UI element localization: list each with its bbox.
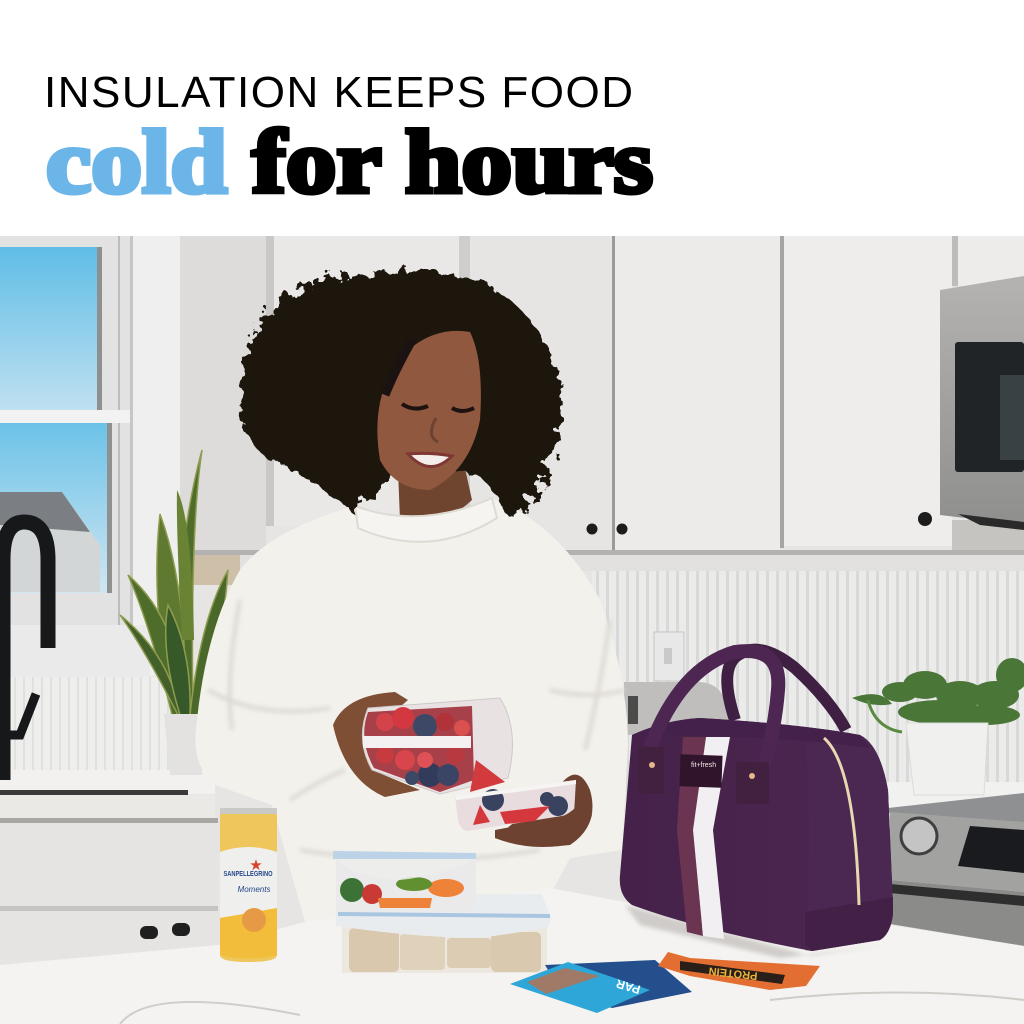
header panel: [0, 0, 1024, 236]
bag label: [679, 754, 723, 788]
veggie container: [333, 851, 476, 911]
nose: [431, 418, 438, 442]
window frame: [0, 236, 130, 628]
can name: SANPELLEGRINO: [224, 871, 273, 878]
kitchen photo scene: [0, 236, 1024, 1024]
snake plant: [120, 450, 228, 715]
title: cold for hours: [46, 113, 653, 212]
face: [377, 331, 481, 490]
smile: [408, 453, 452, 467]
upper cabinets: [180, 236, 1024, 585]
berry jar: [362, 698, 512, 794]
neighbouring house: [0, 492, 100, 592]
bag handle tab right: [736, 762, 769, 804]
jar glass: [362, 698, 512, 794]
can star: ★: [249, 857, 263, 874]
pouch window: [527, 968, 600, 994]
woman: [195, 271, 628, 922]
veggie lid: [333, 851, 476, 859]
blue pouch: [510, 962, 650, 1013]
jar berries: [364, 706, 474, 792]
protein bar: [658, 952, 820, 990]
title: insulation keeps food: INSULATION KEEPS FOOD: [44, 68, 633, 117]
can peach: [242, 908, 266, 932]
counter behind stove: [886, 782, 1024, 812]
faucet: [3, 522, 48, 780]
pothos plant: [852, 658, 1024, 732]
jar glare: [363, 736, 471, 748]
wrap lid: [336, 894, 551, 938]
kitchen island marble: [0, 888, 1024, 1024]
bag handle tab left: [638, 747, 664, 794]
window: [0, 236, 180, 677]
cabinet knobs: [586, 512, 932, 534]
stove front: [890, 812, 1024, 892]
bag end panel shading: [805, 735, 893, 951]
neck: [398, 455, 472, 522]
white pot right: [906, 723, 988, 795]
berry tub: [455, 780, 576, 831]
eyes: [402, 404, 474, 411]
bag white stripe: [693, 737, 730, 939]
stove: [886, 782, 1024, 946]
wrap container: [336, 894, 551, 973]
left hand: [333, 692, 420, 797]
hair back: [240, 271, 560, 518]
can: sanpellegrino: [220, 808, 277, 962]
bag rivets: [649, 762, 755, 779]
bag zipper: [824, 738, 859, 905]
berries spilling: [470, 760, 505, 792]
hair side curl: [385, 340, 412, 395]
toaster: [624, 682, 728, 735]
lower left wainscot: [0, 677, 170, 777]
left counter and lower cabinets: [0, 770, 218, 958]
backsplash: [592, 571, 1024, 796]
lower glass: [0, 423, 107, 593]
sweater shading: [208, 600, 625, 860]
can flavour: Moments: [238, 885, 270, 894]
upper glass: [0, 247, 97, 410]
stove lower: [890, 880, 1024, 946]
wall background: [0, 236, 1024, 1024]
bag top panel: [632, 718, 870, 748]
sweater body: [195, 498, 628, 922]
plant pot left: [164, 714, 205, 775]
outlet: [654, 632, 684, 681]
pouch brand: PAR: [614, 976, 642, 997]
right hand: [495, 775, 592, 846]
bag base band: [805, 897, 893, 951]
microwave: [940, 276, 1024, 530]
cooktop glass: [888, 793, 1024, 823]
bag shadow: [625, 905, 885, 958]
collar: [355, 498, 497, 542]
snack pouches: PROTEIN: [708, 964, 758, 982]
purple lunch bag: [620, 650, 893, 951]
bag plum stripe: [677, 737, 706, 936]
bag back handle: [727, 650, 846, 730]
dark blue pouch: [545, 960, 692, 1008]
right fingers: [495, 800, 592, 847]
faucet handle: [4, 694, 36, 735]
can label: [220, 847, 277, 918]
can body: [220, 808, 277, 962]
bag front handle: [650, 651, 778, 772]
snack pouches: [510, 952, 820, 1013]
bag body: [620, 718, 893, 951]
marble veins: [120, 992, 1024, 1024]
bag label: fit+fresh: [691, 762, 716, 769]
word: cold: cold: [46, 113, 227, 212]
words: for hours: for hours: [252, 113, 653, 212]
